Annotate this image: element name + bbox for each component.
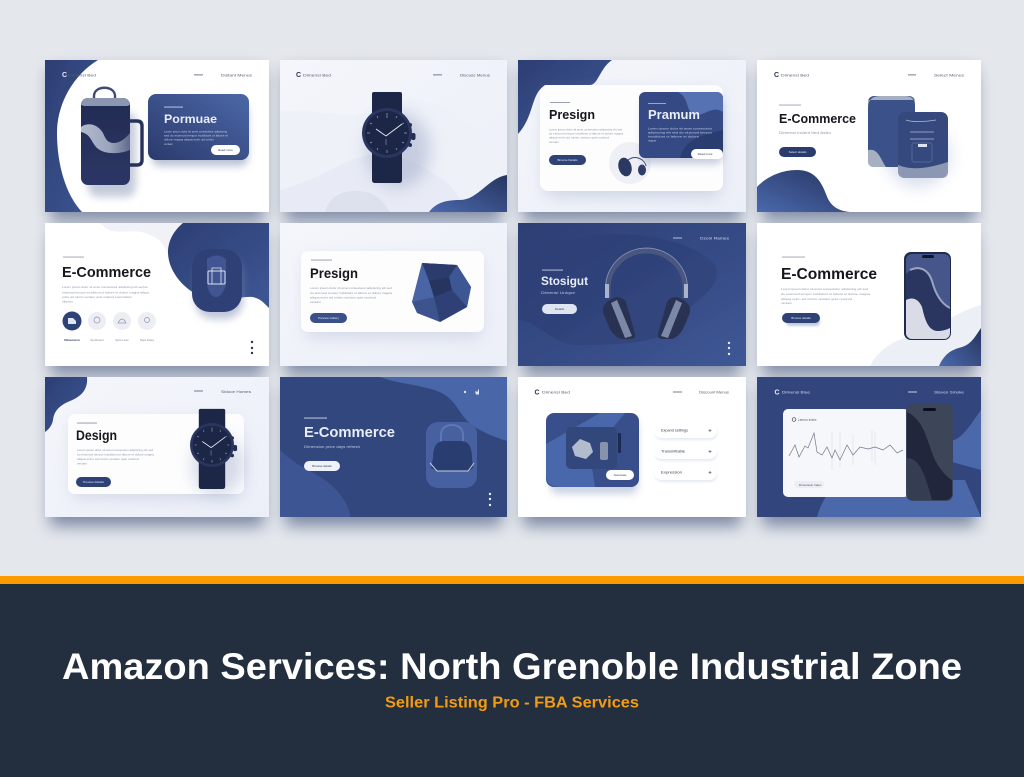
panel: Pormuae promo: sed do eiusmod tempor incididunt ut labore et — [164, 134, 228, 138]
panel: white content card: Lorem ipsum dolor sit amet consectetur adipiscing elit sed — [77, 448, 153, 452]
panel: product tile: Automate — [614, 473, 627, 477]
panel: white content card: veniam — [549, 140, 560, 144]
icon row: feature circles: Sentiment — [90, 338, 104, 342]
nav: logo and links: C — [62, 72, 67, 79]
panel: card 7 Stosigut headphones — [518, 223, 746, 366]
panel: white content card: Preview Details — [83, 480, 104, 484]
icon: bag — [426, 422, 477, 488]
nav: logo and links: C — [774, 390, 780, 396]
icon: mug — [81, 88, 142, 197]
nav: logo and links: Distant Menus — [221, 72, 252, 78]
panel: white content card: aliqua enim ad minim veniam quis nostrud — [77, 457, 139, 461]
panel: card 2 watch — [280, 60, 507, 212]
nav: links: Sidoce Homes — [221, 389, 251, 394]
icon: watch — [362, 92, 430, 188]
panel: Pramum promo: Pramum — [648, 108, 700, 122]
heading: E-Commerce: Dimensi Indent bed Astro — [779, 131, 831, 135]
subtitle: Seller Listing Pro - FBA Services — [385, 694, 639, 712]
panel: Pramum promo: incididunt ut labore et dolore — [648, 134, 699, 138]
panel: card 11 product list — [518, 377, 746, 517]
list: expandable rows: Expression — [661, 470, 682, 474]
icon row: feature circles: Spot Less — [115, 338, 129, 342]
panel: product tile — [546, 413, 639, 494]
nav: logo and links — [774, 390, 965, 396]
nav: links: Dzoni Rames — [700, 236, 729, 240]
chart: line chart panel: Dimension Index — [799, 483, 822, 487]
panel: Pormuae promo: dolore magna aliqua enim ad minim — [164, 138, 215, 142]
heading: E-Commerce: E-Commerce — [62, 264, 151, 281]
panel: card 3 Presign and Pramum — [518, 60, 746, 212]
chart: line chart panel — [783, 409, 909, 497]
nav: logo and links: C — [296, 72, 301, 79]
panel: white content card: Design — [76, 427, 117, 443]
panel: Pormuae promo: veniam — [164, 142, 173, 146]
panel: Pramum promo: Lorem ipsum dolor sit amet consectetur — [648, 126, 712, 130]
panel: white content card: veniam — [310, 300, 322, 304]
heading: Stosigut: Dimensi Unique — [541, 291, 575, 295]
nav: logo and links: Select Menus — [934, 72, 964, 78]
panel: white content card: Lorem ipsum dolor sit amet consectetur adipiscing elit sed — [549, 128, 622, 132]
heading: E-Commerce: ullamco — [62, 300, 73, 304]
panel: card 8 E-Commerce phone — [757, 223, 981, 366]
heading: E-Commerce: Browse details — [791, 316, 811, 320]
nav: links — [673, 237, 729, 240]
nav: logo and links: C — [774, 72, 779, 79]
panel: white content card: Preview Gallery — [318, 316, 339, 320]
icon: suitcase badge — [192, 249, 243, 319]
footer band — [0, 584, 1024, 777]
panel: Pramum promo: magna — [648, 138, 656, 142]
heading: E-Commerce — [781, 257, 877, 326]
panel: card 1 mug and Pormuae — [45, 60, 269, 212]
nav: logo and links: Dimensi Blue — [782, 390, 811, 394]
icon: watch — [190, 409, 244, 495]
heading: E-Commerce: Lorem ipsum dolor sit amet consectetur adipiscing elit sed — [781, 287, 868, 291]
panel: white content card: aliqua enim ad minim veniam quis nostrud — [549, 136, 609, 140]
heading: E-Commerce: enim ad minim veniam quis nostrud exercitation — [62, 295, 132, 299]
heading: E-Commerce: Lorem ipsum dolor sit amet consectetur adipiscing elit sed do — [62, 285, 148, 289]
icon row: feature circles: Dimension — [64, 338, 80, 342]
panel: white content card — [540, 85, 723, 196]
heading: E-Commerce: E-Commerce — [779, 111, 856, 126]
heading: E-Commerce: Select details — [789, 150, 807, 154]
heading: Stosigut: Details — [555, 307, 565, 311]
panel: card 9 Design watch — [45, 377, 269, 517]
nav: logo and links — [534, 390, 729, 396]
heading: E-Commerce: eiusmod tempor incididunt ut labore et dolore magna aliqua — [62, 290, 149, 294]
nav: logo and links: Dimensi Bed — [781, 72, 809, 78]
list: expandable rows — [654, 423, 717, 482]
nav: logo and links — [296, 72, 490, 77]
heading: E-Commerce: Dimension price days refresh — [304, 445, 360, 449]
panel: Pramum promo: Read more — [698, 152, 713, 156]
panel: card 10 E-Commerce bag — [280, 377, 507, 517]
icon: pagination dots — [728, 342, 730, 355]
panel: white content card: Lorem ipsum dolor sit amet consectetur adipiscing elit sed — [310, 286, 392, 290]
heading: E-Commerce — [779, 105, 856, 157]
chart: line chart panel: Lemon Index — [798, 418, 817, 422]
heading: E-Commerce — [62, 257, 151, 304]
heading: E-Commerce: do eiusmod tempor incididunt ut labore et dolore magna — [781, 292, 870, 296]
panel: card 5 E-Commerce icons — [45, 223, 269, 366]
panel: white content card: Presign — [310, 265, 358, 281]
panel: white content card: aliqua enim ad minim veniam quis nostrud — [310, 296, 376, 300]
nav: logo and links — [62, 72, 252, 77]
heading: Stosigut: Stosigut — [541, 274, 588, 288]
icon: headphones — [603, 248, 690, 339]
icon: earbuds — [609, 142, 651, 184]
nav: logo and links: Discount Menus — [699, 390, 729, 394]
panel: Pormuae promo: Lorem ipsum dolor sit amet consectetur adipiscing — [164, 130, 227, 134]
panel: Pramum promo — [639, 92, 723, 164]
nav: small icons — [464, 390, 479, 394]
panel: Pormuae promo: Pormuae — [164, 112, 217, 126]
heading: E-Commerce — [304, 418, 395, 471]
card shadows — [50, 70, 976, 526]
icon: smartphone — [904, 252, 951, 340]
list: expandable rows: Expand settings — [661, 428, 688, 432]
heading: E-Commerce: veniam — [781, 301, 793, 305]
icon row: feature circles — [62, 312, 156, 342]
icon: layered devices — [868, 96, 950, 187]
panel: white content card — [301, 251, 484, 338]
panel: white content card: Presign — [549, 107, 595, 122]
panel: Pormuae promo: Read more — [218, 148, 233, 152]
icon: smartphone — [906, 404, 953, 501]
accent bar — [0, 576, 1024, 584]
nav: logo and links: Dimensi Bed — [68, 72, 96, 78]
nav: logo and links — [774, 72, 964, 77]
nav: logo and links: Discuss Menus — [460, 72, 490, 78]
heading: E-Commerce: E-Commerce — [781, 266, 877, 283]
heading: E-Commerce: aliqua enim ad minim veniam quis nostrud — [781, 297, 852, 301]
panel: white content card — [68, 414, 244, 499]
panel: white content card: Browse Details — [557, 158, 578, 162]
nav: logo and links: Steven Smoke — [934, 390, 965, 394]
heading: E-Commerce: Browse details — [312, 464, 332, 468]
panel: card 4 E-Commerce devices — [757, 60, 981, 212]
heading: Stosigut — [541, 270, 588, 314]
panel: white content card: do eiusmod tempor incididunt ut labore et dolore magna — [310, 291, 392, 295]
icon: pagination dots — [489, 493, 491, 506]
nav: logo and links: Dimensi Bed — [542, 390, 570, 394]
icon row: feature circles: Spot Index — [140, 338, 155, 342]
panel: white content card: do eiusmod tempor incididunt ut labore et dolore magna — [549, 132, 623, 136]
panel: Pramum promo: adipiscing elit sed do eiusmod tempor — [648, 130, 712, 134]
nav: logo and links: Dimensi Bed — [303, 72, 331, 78]
heading: E-Commerce: E-Commerce — [304, 424, 395, 441]
icon: faceted gem — [412, 263, 471, 322]
panel: white content card: do eiusmod tempor incididunt ut labore et dolore magna — [77, 452, 154, 456]
panel: white content card: veniam — [77, 462, 88, 466]
nav: logo and links: C — [534, 390, 540, 396]
nav: links — [194, 390, 251, 393]
panel: Pormuae promo — [148, 94, 249, 166]
icon: pagination dots — [251, 341, 253, 354]
panel: card 6 Presign gem — [280, 223, 507, 366]
list: expandable rows: Transmittable — [661, 450, 685, 454]
panel: card 12 analytics and phone — [757, 377, 981, 517]
title: Amazon Services: North Grenoble Industrial Zone — [62, 646, 962, 687]
